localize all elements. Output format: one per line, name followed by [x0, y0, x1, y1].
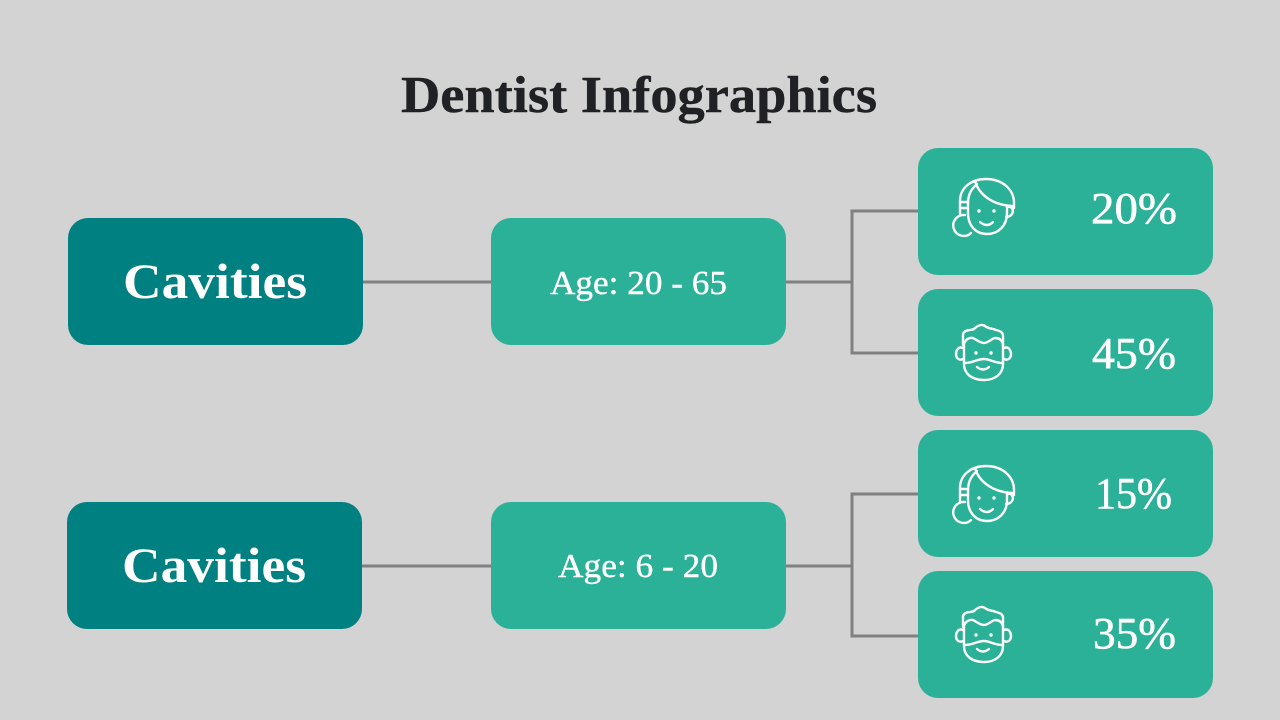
value: 20%: [1091, 184, 1177, 233]
panel: men 35%: [918, 571, 1213, 698]
connector lines: top group: [363, 211, 918, 353]
icon: woman: [953, 179, 1014, 236]
panel: age 6 - 20: [491, 502, 786, 629]
value: 15%: [1095, 469, 1172, 518]
value: 45%: [1092, 329, 1176, 378]
panel: women 20%: [918, 148, 1213, 275]
panel: cavities top: [68, 218, 363, 345]
icon: man: [956, 325, 1011, 380]
panel: cavities bottom: [67, 502, 362, 629]
panel: women 15%: [918, 430, 1213, 557]
panel: cavities bottom: Cavities: [122, 537, 306, 593]
value: 35%: [1093, 609, 1176, 658]
panel: men 45%: [918, 289, 1213, 416]
panel: cavities top: Cavities: [123, 253, 307, 309]
panel: age 20 - 65: [491, 218, 786, 345]
connector lines: bottom group: [362, 494, 918, 636]
title: Dentist Infographics: [401, 67, 877, 124]
icon: woman: [953, 466, 1014, 523]
icon: man: [956, 607, 1011, 662]
panel: age 6 - 20: Age: 6 - 20: [558, 548, 718, 585]
panel: age 20 - 65: Age: 20 - 65: [550, 265, 727, 302]
